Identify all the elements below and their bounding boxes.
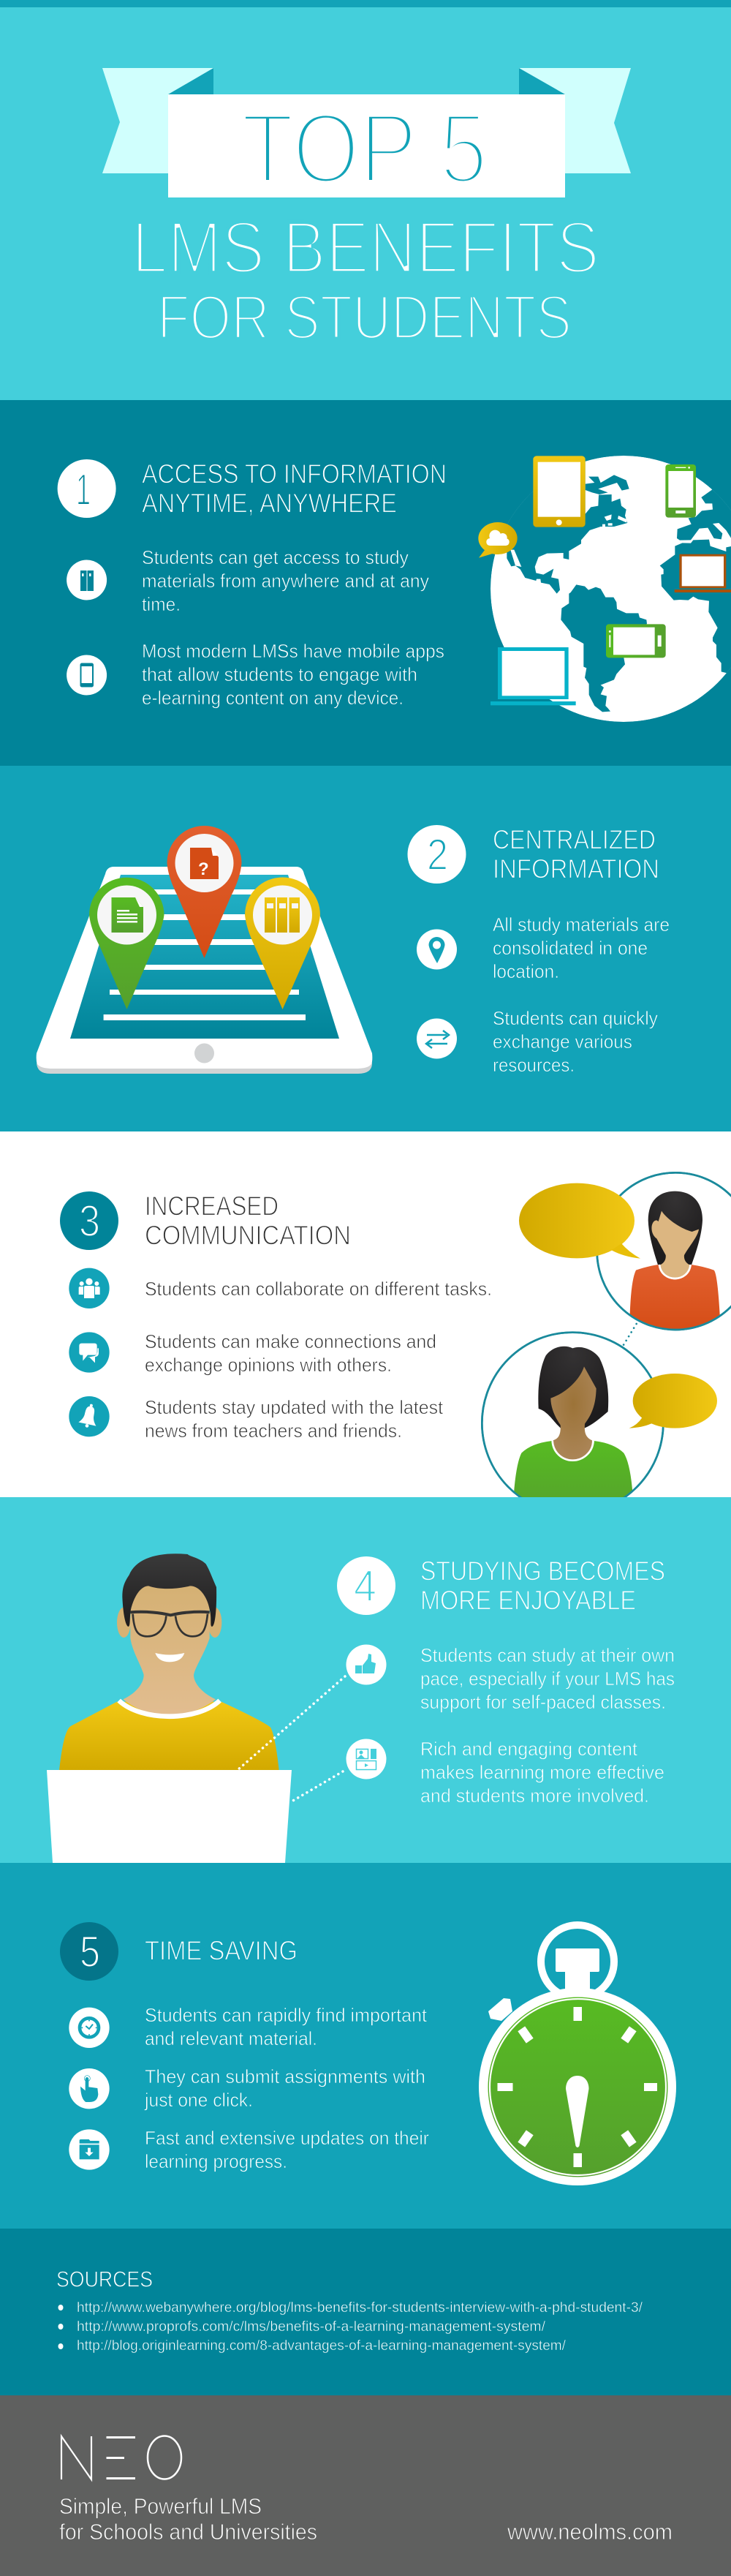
heading 5: TIME SAVING bbox=[145, 1935, 298, 1966]
title: for students: FOR STUDENTS bbox=[157, 283, 572, 353]
icon: pointing hand bbox=[69, 2068, 110, 2109]
text: find material bbox=[145, 2004, 428, 2049]
map pin: green document bbox=[89, 878, 164, 1009]
number badge 4 bbox=[337, 1556, 395, 1615]
text: updates bbox=[145, 1396, 444, 1442]
people conversation illustration bbox=[482, 1172, 731, 1516]
stopwatch body bbox=[479, 1988, 676, 2185]
icon: bell bbox=[69, 1396, 110, 1436]
device: cyan laptop bbox=[491, 647, 576, 705]
text: rich content: makes learning more effective bbox=[420, 1761, 664, 1783]
text: self-paced: support for self-paced classes. bbox=[420, 1691, 666, 1713]
text: one click: just one click. bbox=[144, 2089, 253, 2111]
heading 4: MORE ENJOYABLE bbox=[420, 1586, 636, 1615]
text: one click: They can submit assignments with bbox=[145, 2065, 425, 2087]
sources heading: SOURCES bbox=[56, 2266, 153, 2292]
stopwatch ticks bbox=[497, 2007, 657, 2167]
panel: benefit 1 access to information bbox=[0, 400, 731, 766]
number badge 4: 4 bbox=[354, 1562, 376, 1611]
text: progress updates: learning progress. bbox=[145, 2150, 287, 2172]
icon: book bbox=[67, 560, 107, 600]
panel: footer bbox=[0, 2395, 731, 2576]
text: connections: exchange opinions with others. bbox=[145, 1354, 392, 1376]
heading 2 bbox=[493, 825, 659, 884]
stopwatch loop and crown bbox=[488, 1925, 614, 2021]
map pin: red quiz: ? bbox=[198, 859, 209, 879]
device: green phone bbox=[665, 464, 696, 518]
icon: location pin bbox=[417, 929, 457, 970]
text: mobile apps bbox=[142, 640, 444, 709]
text: find material: Students can rapidly find important bbox=[145, 2004, 428, 2026]
panel: benefit 2 centralized information bbox=[0, 766, 731, 1131]
icon: media content bbox=[346, 1739, 386, 1779]
panel: hero bbox=[0, 0, 731, 400]
text: progress updates bbox=[145, 2127, 429, 2172]
dotted connector bbox=[624, 1324, 637, 1345]
heading 2: INFORMATION bbox=[493, 854, 659, 884]
text: updates: Students stay updated with the latest bbox=[145, 1396, 444, 1418]
panel: benefit 4 studying becomes more enjoyable bbox=[0, 1497, 731, 1863]
title: lms benefits: LMS BENEFITS bbox=[132, 207, 599, 289]
icon: cloud speech bubble bbox=[478, 522, 518, 558]
tagline bbox=[59, 2493, 317, 2545]
text: mobile apps: that allow students to engage with bbox=[142, 663, 417, 685]
text: consolidated materials: consolidated in one bbox=[493, 937, 648, 959]
tagline: Simple, Powerful LMS bbox=[59, 2493, 262, 2519]
text: access study materials bbox=[142, 546, 429, 615]
text: connections bbox=[145, 1330, 436, 1376]
text: exchange resources bbox=[493, 1007, 658, 1076]
website: www.neolms.com bbox=[507, 2519, 673, 2545]
hair bbox=[122, 1553, 216, 1627]
heading 2: CENTRALIZED bbox=[493, 825, 656, 854]
icon: group of people bbox=[69, 1268, 110, 1308]
text: rich content: and students more involved. bbox=[420, 1785, 649, 1807]
number badge 3 bbox=[60, 1191, 118, 1250]
icon: exchange arrows bbox=[417, 1018, 457, 1059]
glasses bbox=[130, 1612, 210, 1636]
laptop bbox=[47, 1770, 292, 1863]
student with glasses bbox=[59, 1553, 279, 1771]
woman in orange bbox=[597, 1172, 731, 1333]
device: yellow tablet bbox=[533, 456, 586, 527]
text: find material: and relevant material. bbox=[145, 2027, 317, 2049]
number badge 3: 3 bbox=[79, 1197, 100, 1246]
text: access study materials: Students can get access to study bbox=[142, 546, 409, 568]
text: rich content: Rich and engaging content bbox=[420, 1738, 638, 1760]
heading 3: COMMUNICATION bbox=[145, 1220, 351, 1251]
text: rich content bbox=[420, 1738, 664, 1807]
number badge 5 bbox=[60, 1922, 118, 1981]
icon: folder download bbox=[69, 2129, 110, 2170]
device: green horizontal tablet bbox=[606, 624, 666, 658]
text: updates: news from teachers and friends. bbox=[145, 1420, 402, 1442]
speech bubble yellow large bbox=[519, 1183, 640, 1259]
text: consolidated materials bbox=[493, 914, 670, 982]
stopwatch hand bbox=[566, 2076, 589, 2147]
stopwatch illustration bbox=[479, 1925, 676, 2185]
panel: benefit 3 increased communication bbox=[60, 1172, 731, 1497]
text: exchange resources: Students can quickly bbox=[493, 1007, 658, 1029]
text: mobile apps: e-learning content on any device. bbox=[142, 687, 404, 709]
number badge 2: 2 bbox=[427, 830, 448, 879]
heading 1 bbox=[142, 459, 447, 518]
source list: http://blog.originlearning.com/8-advantages-of-a-learning-management-system/ bbox=[77, 2338, 567, 2354]
title: top 5: TOP 5 bbox=[241, 93, 488, 205]
smile bbox=[155, 1653, 184, 1662]
icon: clock bbox=[69, 2008, 110, 2048]
source list: http://www.webanywhere.org/blog/lms-benefits-for-students-interview-with-a-phd-student-3/ bbox=[77, 2300, 643, 2316]
number badge 2 bbox=[408, 825, 466, 884]
face and neck bbox=[123, 1580, 216, 1715]
panel: benefit 5 time saving bbox=[0, 1863, 731, 2229]
dotted connector lines bbox=[238, 1676, 345, 1801]
text: consolidated materials: All study materials are bbox=[493, 914, 670, 935]
woman in green bbox=[482, 1333, 663, 1516]
logo: NEO bbox=[61, 2436, 181, 2479]
heading 4 bbox=[420, 1556, 665, 1615]
map pin: red quiz bbox=[167, 826, 241, 958]
heading 4: STUDYING BECOMES bbox=[420, 1556, 665, 1586]
heading 3: INCREASED bbox=[145, 1191, 279, 1221]
icon: mobile phone bbox=[67, 655, 107, 695]
text: access study materials: materials from anywhere and at any bbox=[142, 570, 429, 592]
shirt bbox=[59, 1702, 279, 1771]
text: connections: Students can make connections and bbox=[145, 1330, 436, 1352]
device: brown laptop bbox=[675, 554, 731, 592]
collar bbox=[119, 1701, 220, 1717]
text: consolidated materials: location. bbox=[493, 960, 559, 982]
globe bbox=[482, 446, 731, 722]
text: self-paced: Students can study at their own bbox=[420, 1644, 675, 1666]
number badge 1 bbox=[58, 459, 116, 518]
text: access study materials: time. bbox=[142, 593, 181, 615]
text: one click bbox=[144, 2065, 425, 2111]
ears bbox=[117, 1608, 221, 1638]
text: exchange resources: exchange various bbox=[493, 1031, 632, 1052]
text: self-paced: pace, especially if your LMS has bbox=[420, 1668, 675, 1690]
speech bubble yellow small bbox=[629, 1374, 717, 1428]
text: self-paced bbox=[420, 1644, 675, 1713]
text: exchange resources: resources. bbox=[493, 1054, 575, 1076]
ribbon banner bbox=[102, 68, 631, 197]
source list bbox=[58, 2300, 643, 2354]
heading 1: ANYTIME, ANYWHERE bbox=[142, 489, 397, 518]
icon: chat bubbles bbox=[69, 1332, 110, 1373]
panel: sources bbox=[0, 2229, 731, 2395]
tagline: for Schools and Universities bbox=[59, 2519, 317, 2545]
text: progress updates: Fast and extensive updates on their bbox=[145, 2127, 429, 2149]
heading 3 bbox=[145, 1191, 351, 1251]
tablet illustration bbox=[37, 867, 372, 1074]
stopwatch face bbox=[488, 1997, 668, 2177]
number badge 5: 5 bbox=[80, 1927, 100, 1976]
text: collaborate: Students can collaborate on different tasks. bbox=[145, 1278, 492, 1300]
source list: http://www.proprofs.com/c/lms/benefits-of-a-learning-management-system/ bbox=[77, 2319, 546, 2335]
text: mobile apps: Most modern LMSs have mobile apps bbox=[142, 640, 444, 662]
icon: thumbs up bbox=[346, 1644, 386, 1685]
globe with devices bbox=[478, 446, 731, 722]
number badge 1: 1 bbox=[76, 465, 91, 514]
heading 1: ACCESS TO INFORMATION bbox=[142, 459, 447, 489]
map pin: yellow binders bbox=[245, 878, 320, 1009]
